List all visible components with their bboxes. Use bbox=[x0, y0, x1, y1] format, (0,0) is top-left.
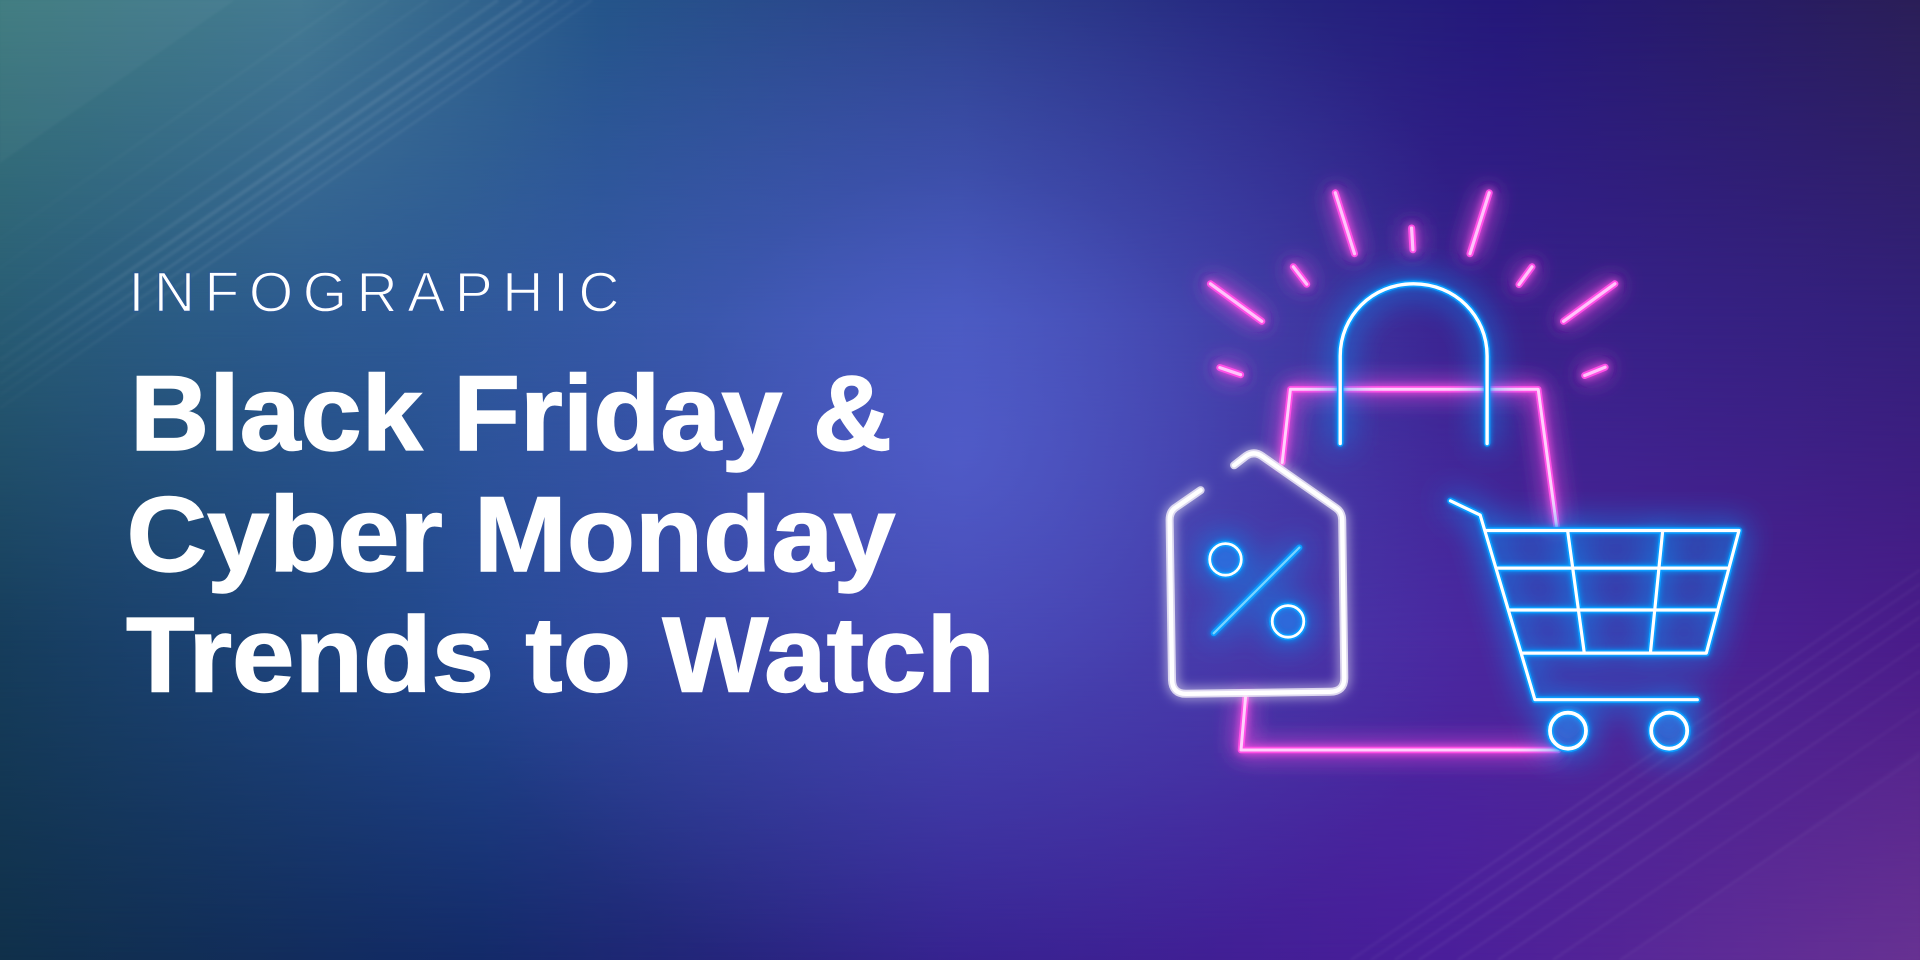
title line 3: Trends to Watch bbox=[126, 594, 995, 714]
title bbox=[126, 353, 995, 714]
label: INFOGRAPHIC: INFOGRAPHIC bbox=[128, 260, 620, 324]
icon: shopping bag body bbox=[1241, 389, 1558, 750]
icon: shopping cart bbox=[1450, 501, 1739, 749]
icon: radiating rays bbox=[1210, 193, 1615, 376]
icon: percent sign bbox=[1210, 544, 1304, 637]
neon illustration bbox=[1170, 193, 1739, 750]
background streaks: bottom right bbox=[1351, 570, 1920, 960]
title line 2: Cyber Monday bbox=[126, 474, 896, 594]
icon: price tag bbox=[1170, 453, 1344, 694]
title line 1: Black Friday & bbox=[130, 353, 892, 473]
icon: shopping bag handle bbox=[1340, 284, 1487, 444]
background streaks: top left bbox=[0, 0, 592, 408]
